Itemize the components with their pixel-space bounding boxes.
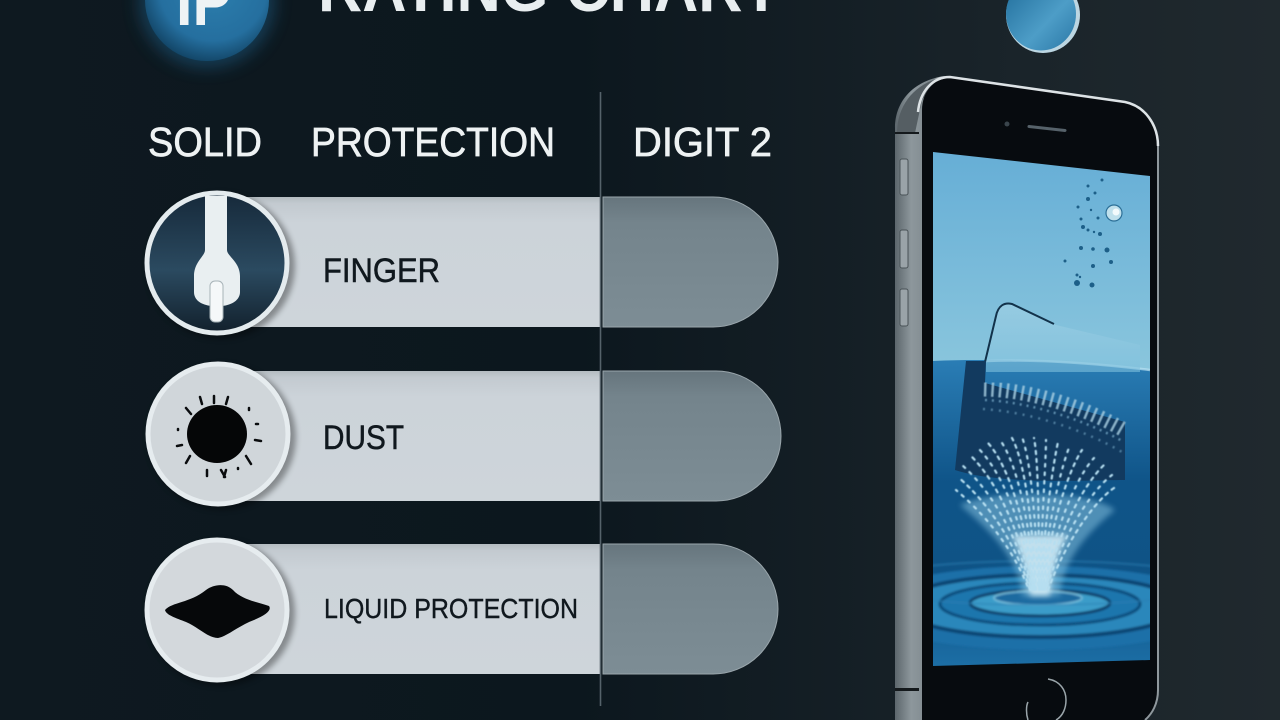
sky area [933,152,1150,372]
floating droplets [1064,178,1113,288]
icon: top water drop [1006,0,1080,53]
serrated water edge [983,389,1124,452]
label: finger: FINGER [323,252,440,290]
column heading: digit 2: DIGIT 2 [633,119,772,165]
row: finger [147,193,778,339]
bar: liquid digit segment [603,544,778,674]
row: dust [148,364,781,510]
phone rim [918,77,1158,720]
icon: finger [147,193,295,339]
column heading: protection: PROTECTION [311,119,555,165]
icon: dust [148,364,296,510]
IP badge icon [139,0,275,68]
phone camera [1004,122,1010,126]
phone side band [895,76,960,720]
phone home button [1026,679,1066,720]
phone side buttons [900,159,908,326]
label: liquid protection: LIQUID PROTECTION [324,593,578,624]
water area [933,360,1150,666]
label: dust: DUST [323,419,404,457]
phone speaker [1029,126,1065,130]
column divider [600,92,602,706]
fountain base glow [960,494,1115,596]
glass above water [986,304,1140,372]
icon: liquid [147,540,295,686]
row: liquid protection [147,540,778,686]
bar: liquid light segment [240,544,600,674]
bar: dust digit segment [603,371,781,501]
bar: dust light segment [240,371,600,501]
water surface highlight [986,361,1150,370]
large droplet [1106,205,1122,221]
phone front body [922,78,1158,720]
submerged dark glass [955,361,1125,481]
fountain spray [956,437,1114,590]
bar: finger digit segment [603,197,778,327]
water ripples [933,560,1150,648]
phone [895,76,1160,720]
column heading: solid: SOLID [148,119,262,165]
phone screen [933,152,1150,666]
bar: finger light segment [240,197,600,327]
